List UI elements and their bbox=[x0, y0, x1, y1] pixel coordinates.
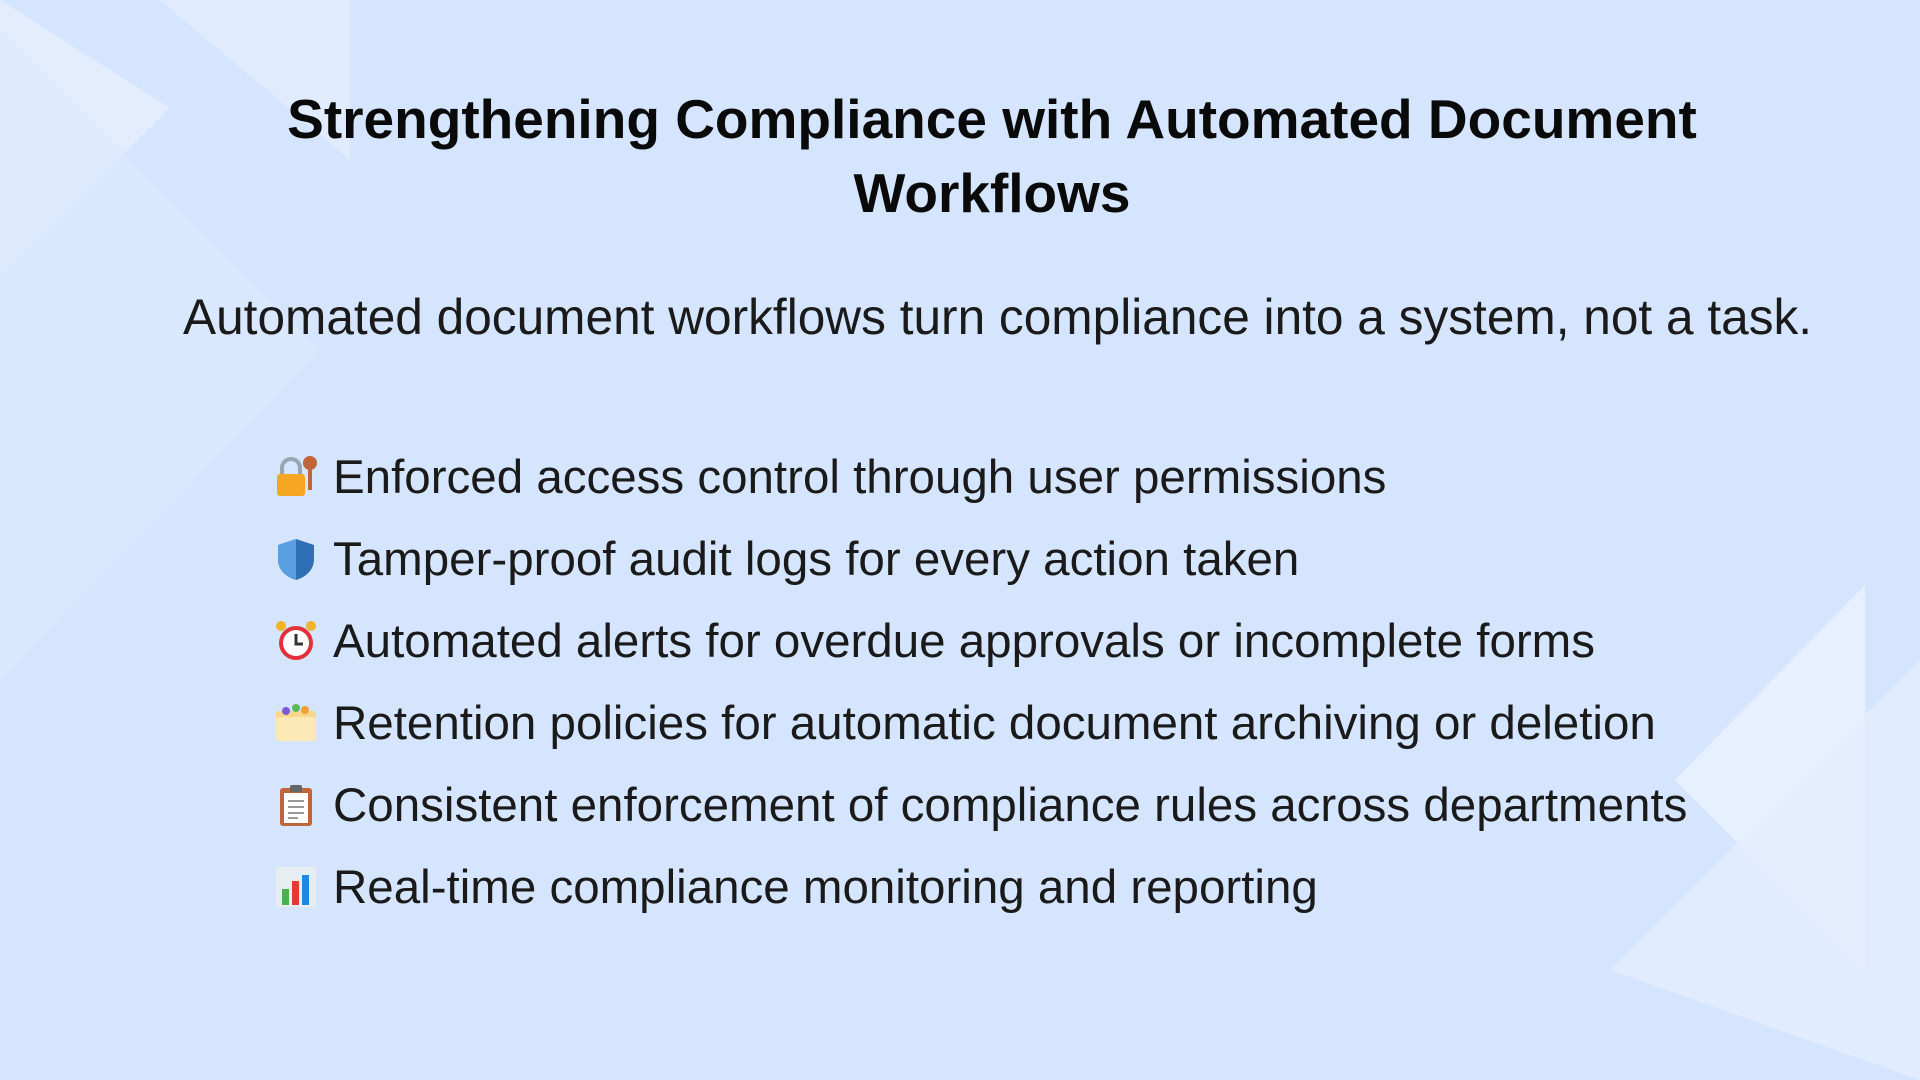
item: retention: Retention policies for automatic document archiving or deletion bbox=[333, 696, 1656, 750]
subtitle: Automated document workflows turn compliance into a system, not a task. bbox=[183, 289, 1812, 345]
item: monitoring: Real-time compliance monitoring and reporting bbox=[333, 860, 1318, 914]
item: audit logs: Tamper-proof audit logs for every action taken bbox=[333, 532, 1299, 586]
item: access control: Enforced access control through user permissions bbox=[333, 450, 1386, 504]
title: Strengthening Compliance with Automated Document bbox=[287, 88, 1697, 150]
item: enforcement: Consistent enforcement of compliance rules across departments bbox=[333, 778, 1687, 832]
item: alerts: Automated alerts for overdue approvals or incomplete forms bbox=[333, 614, 1595, 668]
title bbox=[287, 88, 1697, 224]
title: Workflows bbox=[853, 162, 1131, 224]
feature list bbox=[276, 450, 1687, 914]
